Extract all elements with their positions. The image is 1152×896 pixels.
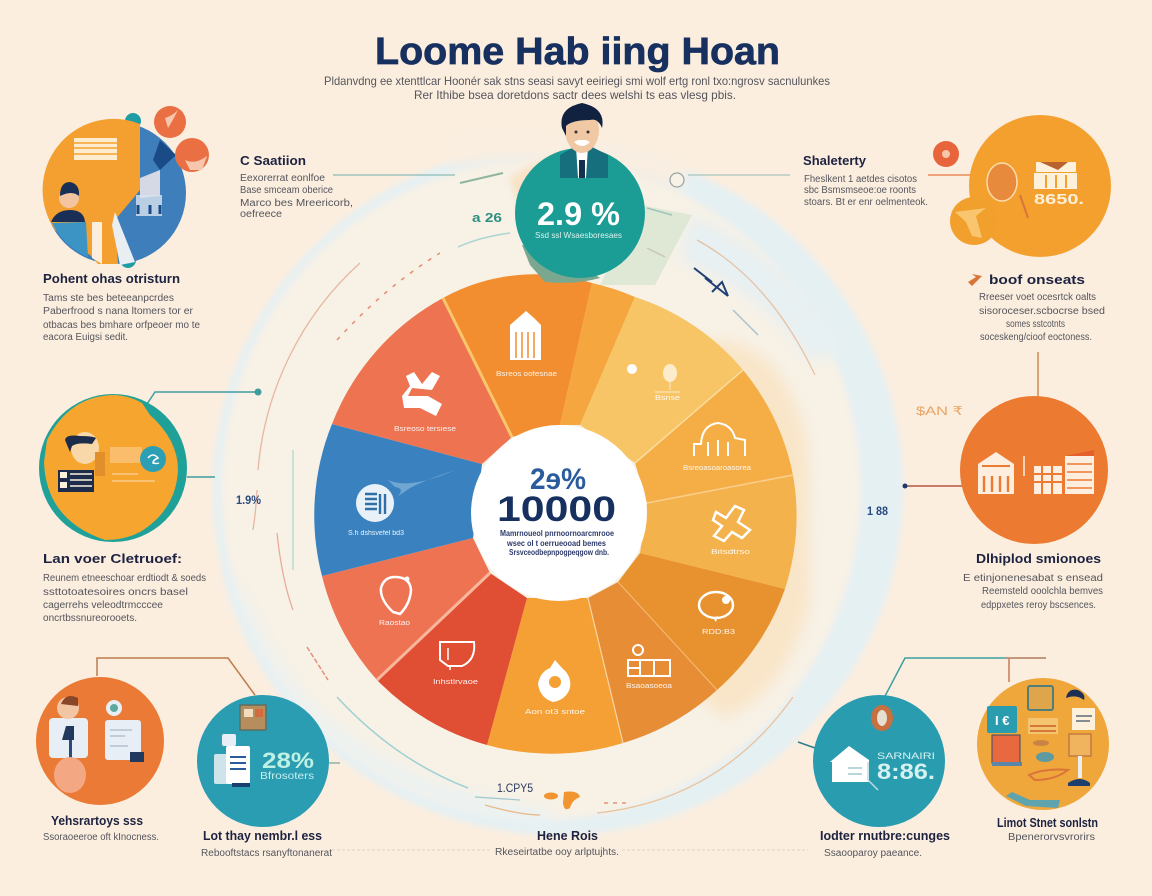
text: Shaleterty: sbc Bsmsmseoe:oe roonts	[804, 185, 916, 196]
ring label: top teal value: a 26	[472, 210, 502, 225]
panel: top-right circle	[928, 115, 1111, 257]
text: Iodter rnutbre:cunges: Ssaooparoy paeance.	[824, 848, 922, 859]
segment: light yellow	[627, 364, 680, 402]
text: Hene Rois: Hene Rois	[537, 828, 598, 843]
text: C Saation	[240, 153, 353, 220]
text: Yehsrartoys sss: Yehsrartoys sss	[51, 813, 143, 828]
text: Iodter rnutbre:cunges	[820, 828, 950, 859]
segment: dark orange right lower: RDD:B3	[702, 629, 735, 636]
text: Lan voer Cletruoef: Reunem etneeschoar erdtiodt & soeds	[43, 573, 206, 584]
segment: orange right middle: Bitsdtrso	[711, 549, 750, 556]
top teal stat circle with person	[515, 103, 645, 283]
text: Dlhiplod smionoes: edppxetes reroy bscsences.	[981, 600, 1096, 611]
text: Dlhiplod smionoes: Dlhiplod smionoes	[976, 551, 1101, 566]
text: Lan voer Cletruoef: oncrtbssnureorooets.	[43, 613, 137, 624]
segment: orange top	[496, 311, 557, 378]
text: C Saation: Eexorerrat eonlfoe	[240, 173, 325, 184]
center value circle: 2ɘ%	[530, 463, 586, 496]
text: Pohent ohas otristurn: Paberfrood s nana ltomers tor er	[43, 306, 194, 317]
panel: bottom-left teal circle: 28%	[262, 748, 314, 773]
segment: orange right upper: Bsreoasoaroasorea	[683, 465, 751, 472]
segment: blue	[348, 470, 455, 537]
ring label: bottom value: 1.CPY5	[497, 781, 533, 795]
text: C Saation: Marco bes Mreericorb,	[240, 198, 353, 209]
text: C Saation: C Saatiion	[240, 153, 306, 168]
panel: bottom-left teal circle	[197, 695, 340, 827]
segment: orange right upper	[683, 423, 751, 472]
segment: orange bottom: Aon ot3 sntoe	[525, 709, 585, 716]
text: boof onseats: soceskeng/cioof eoctoness.	[980, 332, 1092, 343]
text: Dlhiplod smionoes: Reemsteld ooolchla bemves	[982, 586, 1103, 597]
segment: dark orange right lower	[699, 592, 735, 636]
text: Pohent ohas otristurn: eacora Euigsi sedit.	[43, 332, 128, 343]
ring label: left percent: 1.9%	[236, 493, 261, 507]
text: Lot thay nembr.l ess: Lot thay nembr.l ess	[203, 828, 322, 843]
segment: orange top: Bsreos oofesnae	[496, 371, 557, 378]
text: boof onseats: sisoroceser.scbocrse bsed	[979, 306, 1105, 317]
text: boof onseats: boof onseats	[989, 272, 1085, 287]
panel: bottom-right teal circle: 8:86.	[877, 759, 935, 784]
segment: coral top	[394, 372, 456, 433]
center value circle	[471, 425, 647, 601]
text: Shaleterty	[803, 153, 928, 208]
text: boof onseats	[968, 272, 1105, 343]
subtitle: Pldanvdng ee xtenttlcar Hoonér sak stns seasi savyt eeiriegi smi wolf ertg ronl txo:ngrosv sacnulunkes	[324, 74, 830, 88]
center value circle: 10000	[497, 490, 616, 529]
panel: bottom-right orange circle: I €	[995, 713, 1009, 728]
text: Lot thay nembr.l ess: Rebooftstacs rsanyftonanerat	[201, 848, 332, 859]
text: Yehsrartoys sss	[43, 813, 159, 843]
subtitle: Rer Ithibe bsea doretdons sactr dees welshi ts eas vlesg pbis.	[414, 88, 736, 102]
text: Lan voer Cletruoef	[43, 551, 206, 624]
subtitle	[324, 74, 830, 102]
central pie chart	[314, 274, 796, 754]
text: Iodter rnutbre:cunges: Iodter rnutbre:cunges	[820, 828, 950, 843]
text: Pohent ohas otristurn: Pohent ohas otristurn	[43, 271, 180, 286]
segment: blue: S.h dshsvefel bd3	[348, 530, 404, 537]
ring label: right percent: 1 88	[867, 504, 888, 518]
text: Dlhiplod smionoes: E etinjonenesabat s ensead	[963, 573, 1103, 584]
text: Hene Rois	[495, 828, 619, 858]
panel: bottom-right orange circle	[977, 658, 1109, 810]
segment: dark orange bottom	[626, 645, 672, 690]
center value circle: wsec ol t oerrueooad bemes	[506, 539, 607, 548]
text: Lan voer Cletruoef: Lan voer Cletruoef:	[43, 551, 182, 566]
text: Lot thay nembr.l ess	[201, 828, 332, 859]
segment: red: Inhstlrvaoe	[433, 679, 478, 686]
text: Pohent ohas otristurn	[43, 271, 200, 343]
text: Limot Stnet sonlstn: Limot Stnet sonlstn	[997, 815, 1098, 830]
segment: dark orange bottom: Bsaoasoeoa	[626, 683, 672, 690]
text: Dlhiplod smionoes	[963, 551, 1103, 611]
text: Limot Stnet sonlstn: Bpenerorvsvrorirs	[1008, 832, 1095, 843]
text: Yehsrartoys sss: Ssoraoeeroe oft kInocness.	[43, 832, 159, 843]
segment: orange bottom	[525, 660, 585, 716]
segment: coral lower: Raostao	[379, 620, 410, 627]
text: Pohent ohas otristurn: Tams ste bes beteeanpcrdes	[43, 293, 174, 304]
panel: right-middle circle	[902, 352, 1108, 544]
center value circle: Srsvceodbepnpogpeqgow dnb.	[509, 548, 609, 557]
text: Shaleterty: Shaleterty	[803, 153, 867, 168]
panel: bottom-right teal circle	[798, 658, 1046, 827]
text: C Saation: Base smceam oberice	[240, 185, 333, 196]
top teal stat circle with person: 2.9 %	[537, 196, 620, 232]
panel: bottom-right teal circle: SARNAIRI	[877, 751, 935, 761]
center value circle: Mamrnoueol pnrnoornoarcmrooe	[500, 529, 614, 538]
panel: bottom-left orange circle	[36, 658, 255, 805]
ring icon: bottom orange figure	[544, 792, 628, 809]
text: Hene Rois: Rkeseirtatbe ooy arlptujhts.	[495, 847, 619, 858]
segment: coral lower	[379, 576, 411, 627]
dashed base line	[332, 849, 808, 851]
panel: top-right circle: 8650.	[1034, 191, 1084, 208]
text: Lan voer Cletruoef: cagerrehs veleodtrmcccee	[43, 600, 163, 611]
label: orange value near right circle: $AN ₹	[916, 404, 964, 418]
text: boof onseats: somes sstcotnts	[1006, 319, 1065, 330]
segment: coral top: Bsreoso tersiese	[394, 426, 456, 433]
ring icon: tool at upper right	[694, 268, 728, 296]
segment: red	[433, 642, 478, 686]
concentric rings background	[213, 129, 903, 835]
text: boof onseats: Rreeser voet ocesrtck oalts	[979, 292, 1096, 303]
panel: left-middle circle	[39, 388, 262, 542]
top teal stat circle with person: Ssd ssl Wsaesboresaes	[535, 231, 622, 240]
text: Shaleterty: stoars. Bt er enr oelmenteok.	[804, 197, 928, 208]
panel: top-left circle	[43, 106, 209, 268]
panel: bottom-left teal circle: Bfrosoters	[260, 771, 314, 782]
text: Limot Stnet sonlstn	[997, 815, 1098, 843]
text: Lan voer Cletruoef: ssttotoatesoires oncrs basel	[43, 587, 188, 598]
title: Loome Hab iing Hoan	[375, 31, 780, 73]
text: C Saation: oefreece	[240, 209, 282, 220]
text: Pohent ohas otristurn: otbacas bes bmhare orfpeoer mo te	[43, 320, 200, 331]
text: Shaleterty: Fheslkent 1 aetdes cisotos	[804, 174, 917, 185]
segment: light yellow: Bsnse	[655, 395, 680, 402]
segment: orange right middle	[711, 506, 750, 556]
